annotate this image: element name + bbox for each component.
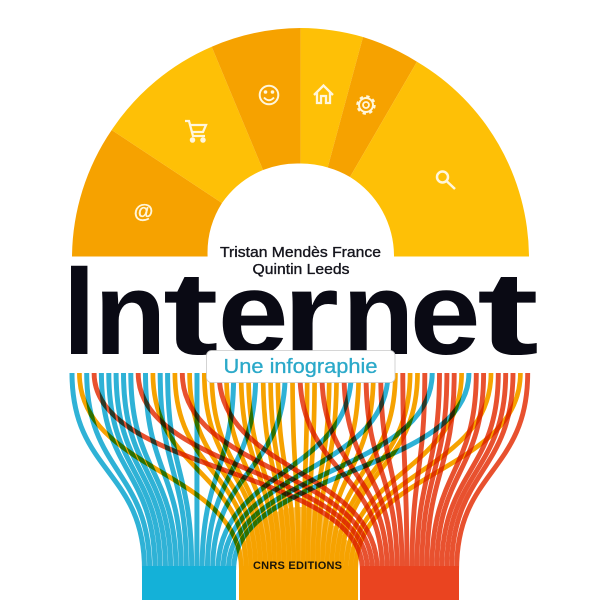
block: orange dome [239, 507, 358, 570]
subtitle label [206, 350, 395, 382]
segment: email [72, 130, 222, 256]
block: orange base [239, 566, 358, 600]
author: Tristan Mendès France: Tristan Mendès France [220, 245, 381, 261]
title: n [94, 248, 166, 380]
icon: gear [358, 96, 374, 114]
chart: cyan strands [72, 373, 469, 570]
segment: shopping [112, 47, 263, 203]
subtitle text: Une infographie [224, 356, 378, 378]
title: n [342, 248, 414, 380]
title [63, 239, 539, 382]
icon: magnifier [437, 172, 455, 189]
title: r [282, 248, 339, 380]
chart: orange strands [79, 373, 520, 570]
segment: home [301, 28, 363, 168]
chart: red strands [94, 373, 528, 570]
panel: semicircle of segments [72, 28, 529, 256]
segment: search [350, 62, 529, 257]
icon: house [314, 86, 333, 103]
author names [220, 245, 381, 278]
segment: social [212, 28, 301, 170]
block: cyan base [142, 566, 236, 600]
icon: at sign: @ [134, 201, 153, 223]
author: Quintin Leeds: Quintin Leeds [252, 262, 350, 278]
title: t [477, 248, 539, 380]
title: I [63, 239, 95, 382]
segment: settings [328, 37, 417, 177]
title: e [218, 248, 289, 380]
title: e [410, 248, 481, 380]
block: red base [360, 566, 459, 600]
publisher: CNRS EDITIONS [253, 560, 342, 572]
title: t [163, 248, 218, 380]
icon: smiley [260, 86, 278, 104]
label box [206, 350, 395, 382]
icon: shopping cart [185, 121, 206, 142]
